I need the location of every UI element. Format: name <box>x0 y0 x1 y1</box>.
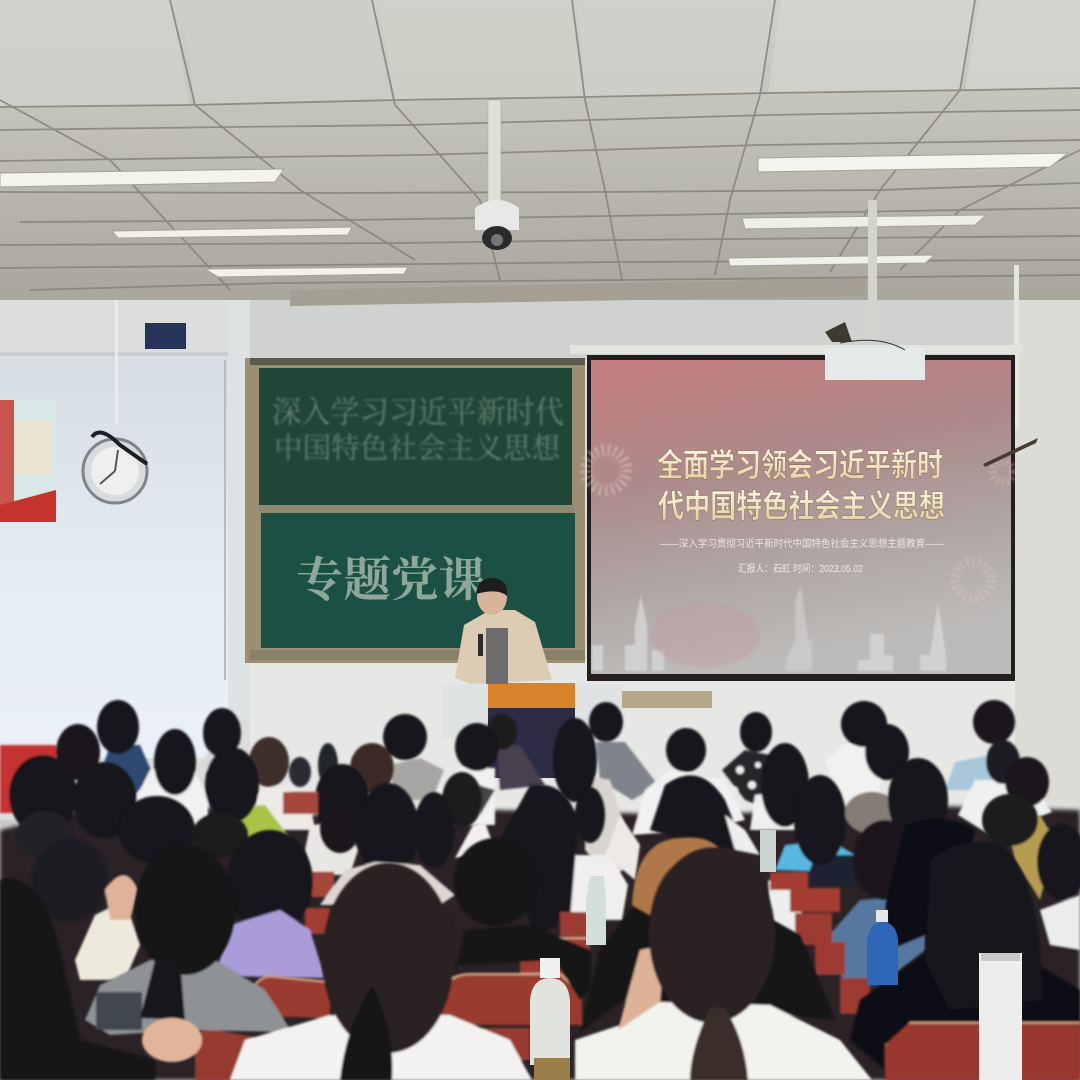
chalk heading on the board <box>272 395 564 465</box>
wall clock <box>83 432 147 503</box>
chalk tray and side table <box>620 691 712 708</box>
slide fireworks <box>586 450 1013 598</box>
ceiling lights <box>0 153 1068 277</box>
audience: back rows <box>0 700 1052 880</box>
water bottle: center <box>586 876 606 945</box>
slide subtitle: ——深入学习贯彻习近平新时代中国特色社会主义思想主题教育—— <box>660 537 944 550</box>
water bottle: front <box>530 958 570 1080</box>
overhead beam <box>290 278 865 306</box>
classroom wall <box>0 265 1080 820</box>
ceiling security camera <box>475 100 519 250</box>
slide title <box>657 447 945 524</box>
chalk heading on the board: 深入学习习近平新时代 <box>272 395 564 430</box>
wall speaker <box>145 323 186 349</box>
slide skyline <box>592 585 946 671</box>
water bottle: blue label <box>867 910 898 985</box>
chalk subject on the board: 专题党课 <box>296 555 486 607</box>
blackboard <box>245 358 585 663</box>
slide presenter and date: 汇报人：石虹 时间：2023.05.02 <box>738 562 863 575</box>
podium <box>442 683 622 778</box>
white paper tube <box>979 953 1022 1080</box>
speaker <box>455 578 552 684</box>
ceiling <box>0 0 1080 300</box>
wall poster <box>0 400 56 522</box>
audience base shadow <box>0 800 1080 1080</box>
small bottle in the middle rows <box>760 830 776 872</box>
slide title: 全面学习领会习近平新时 <box>657 447 943 483</box>
projector <box>825 200 1038 467</box>
audience: middle rows <box>17 758 1080 1014</box>
slide title: 代中国特色社会主义思想 <box>658 488 945 524</box>
audience: front rows <box>0 838 1080 1080</box>
chalk heading on the board: 中国特色社会主义思想 <box>274 432 561 465</box>
projection screen <box>570 345 1022 681</box>
